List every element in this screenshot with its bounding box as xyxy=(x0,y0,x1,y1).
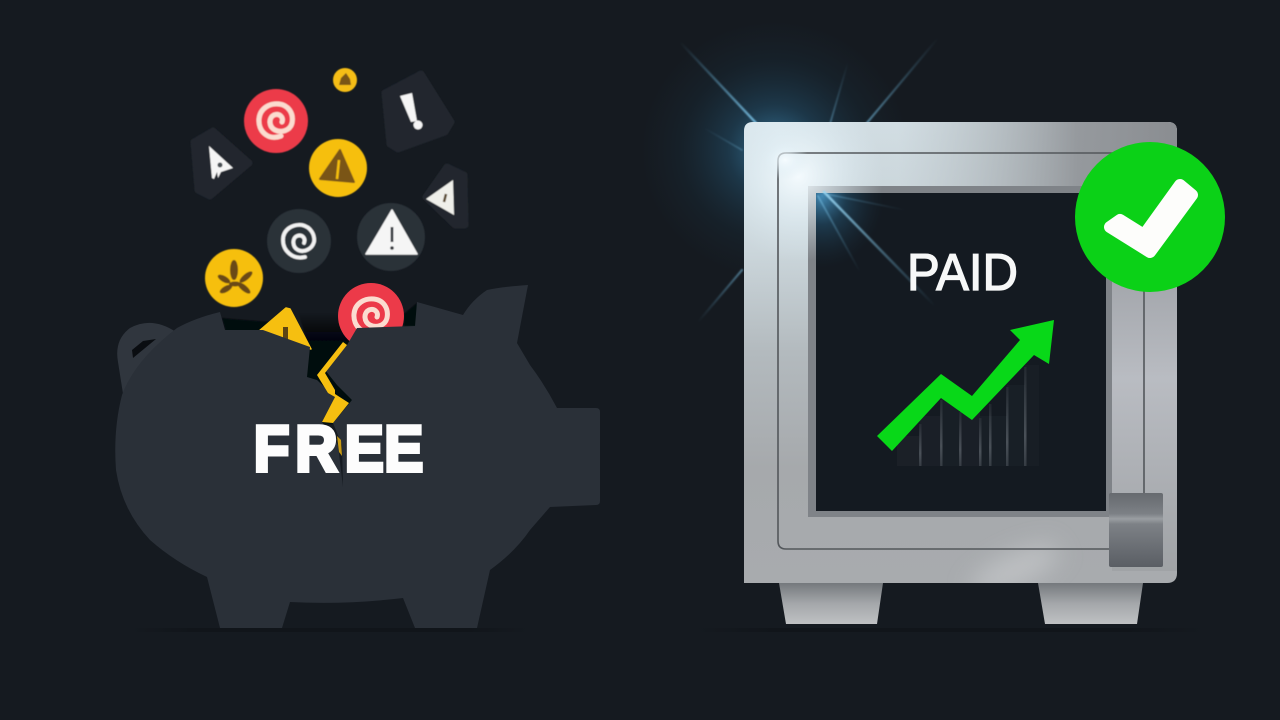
glow inside the window xyxy=(816,190,928,300)
dark gaps behind the piggy xyxy=(222,303,417,424)
piggy tail ring xyxy=(117,323,176,400)
safe door outline xyxy=(778,153,1144,549)
panel: paid safe xyxy=(678,46,1225,624)
yellow crack sliver behind text xyxy=(337,436,342,456)
panel: free piggy bank xyxy=(115,68,600,628)
icon: yellow warning triangle falling in xyxy=(258,308,311,349)
infographic canvas xyxy=(115,46,1225,628)
icon: red spiral badge falling in xyxy=(338,283,404,349)
tail hole xyxy=(132,339,156,358)
faded bar chart xyxy=(897,365,1039,466)
FREE label: FREE xyxy=(254,413,423,486)
icon: dark tile with white rocket triangle xyxy=(194,131,249,196)
PAID label: PAID xyxy=(907,244,1018,302)
ground shadow: piggy xyxy=(130,628,530,632)
icon: red spiral badge xyxy=(244,89,308,153)
safe feet xyxy=(779,583,1143,624)
safe right frame xyxy=(1112,186,1177,571)
icon: small yellow badge xyxy=(333,68,357,92)
green growth arrow xyxy=(877,320,1054,451)
icon: dark warning badge xyxy=(357,203,425,271)
metal glare over door line xyxy=(761,140,809,180)
green check badge xyxy=(1075,142,1225,292)
icon: yellow splat badge xyxy=(205,249,263,307)
yellow lightning crack xyxy=(317,342,349,423)
ground shadow: safe xyxy=(695,628,1205,632)
window recess xyxy=(808,186,1112,517)
icon: dark at-sign badge xyxy=(267,209,331,273)
light rays behind safe xyxy=(680,38,938,322)
piggy body xyxy=(115,285,600,628)
safe top frame shading xyxy=(778,122,1177,186)
window interior xyxy=(816,193,1106,511)
icon: dark tile with small warning triangle xyxy=(426,167,465,225)
safe handle xyxy=(1109,493,1163,567)
metal sheen xyxy=(976,544,1056,583)
safe outer body xyxy=(744,122,1177,583)
icon: dark tile with exclamation mark xyxy=(385,74,451,149)
metal glare at corner xyxy=(750,132,876,254)
blue glow behind safe corner xyxy=(640,20,910,280)
icon: yellow warning badge xyxy=(309,139,367,197)
